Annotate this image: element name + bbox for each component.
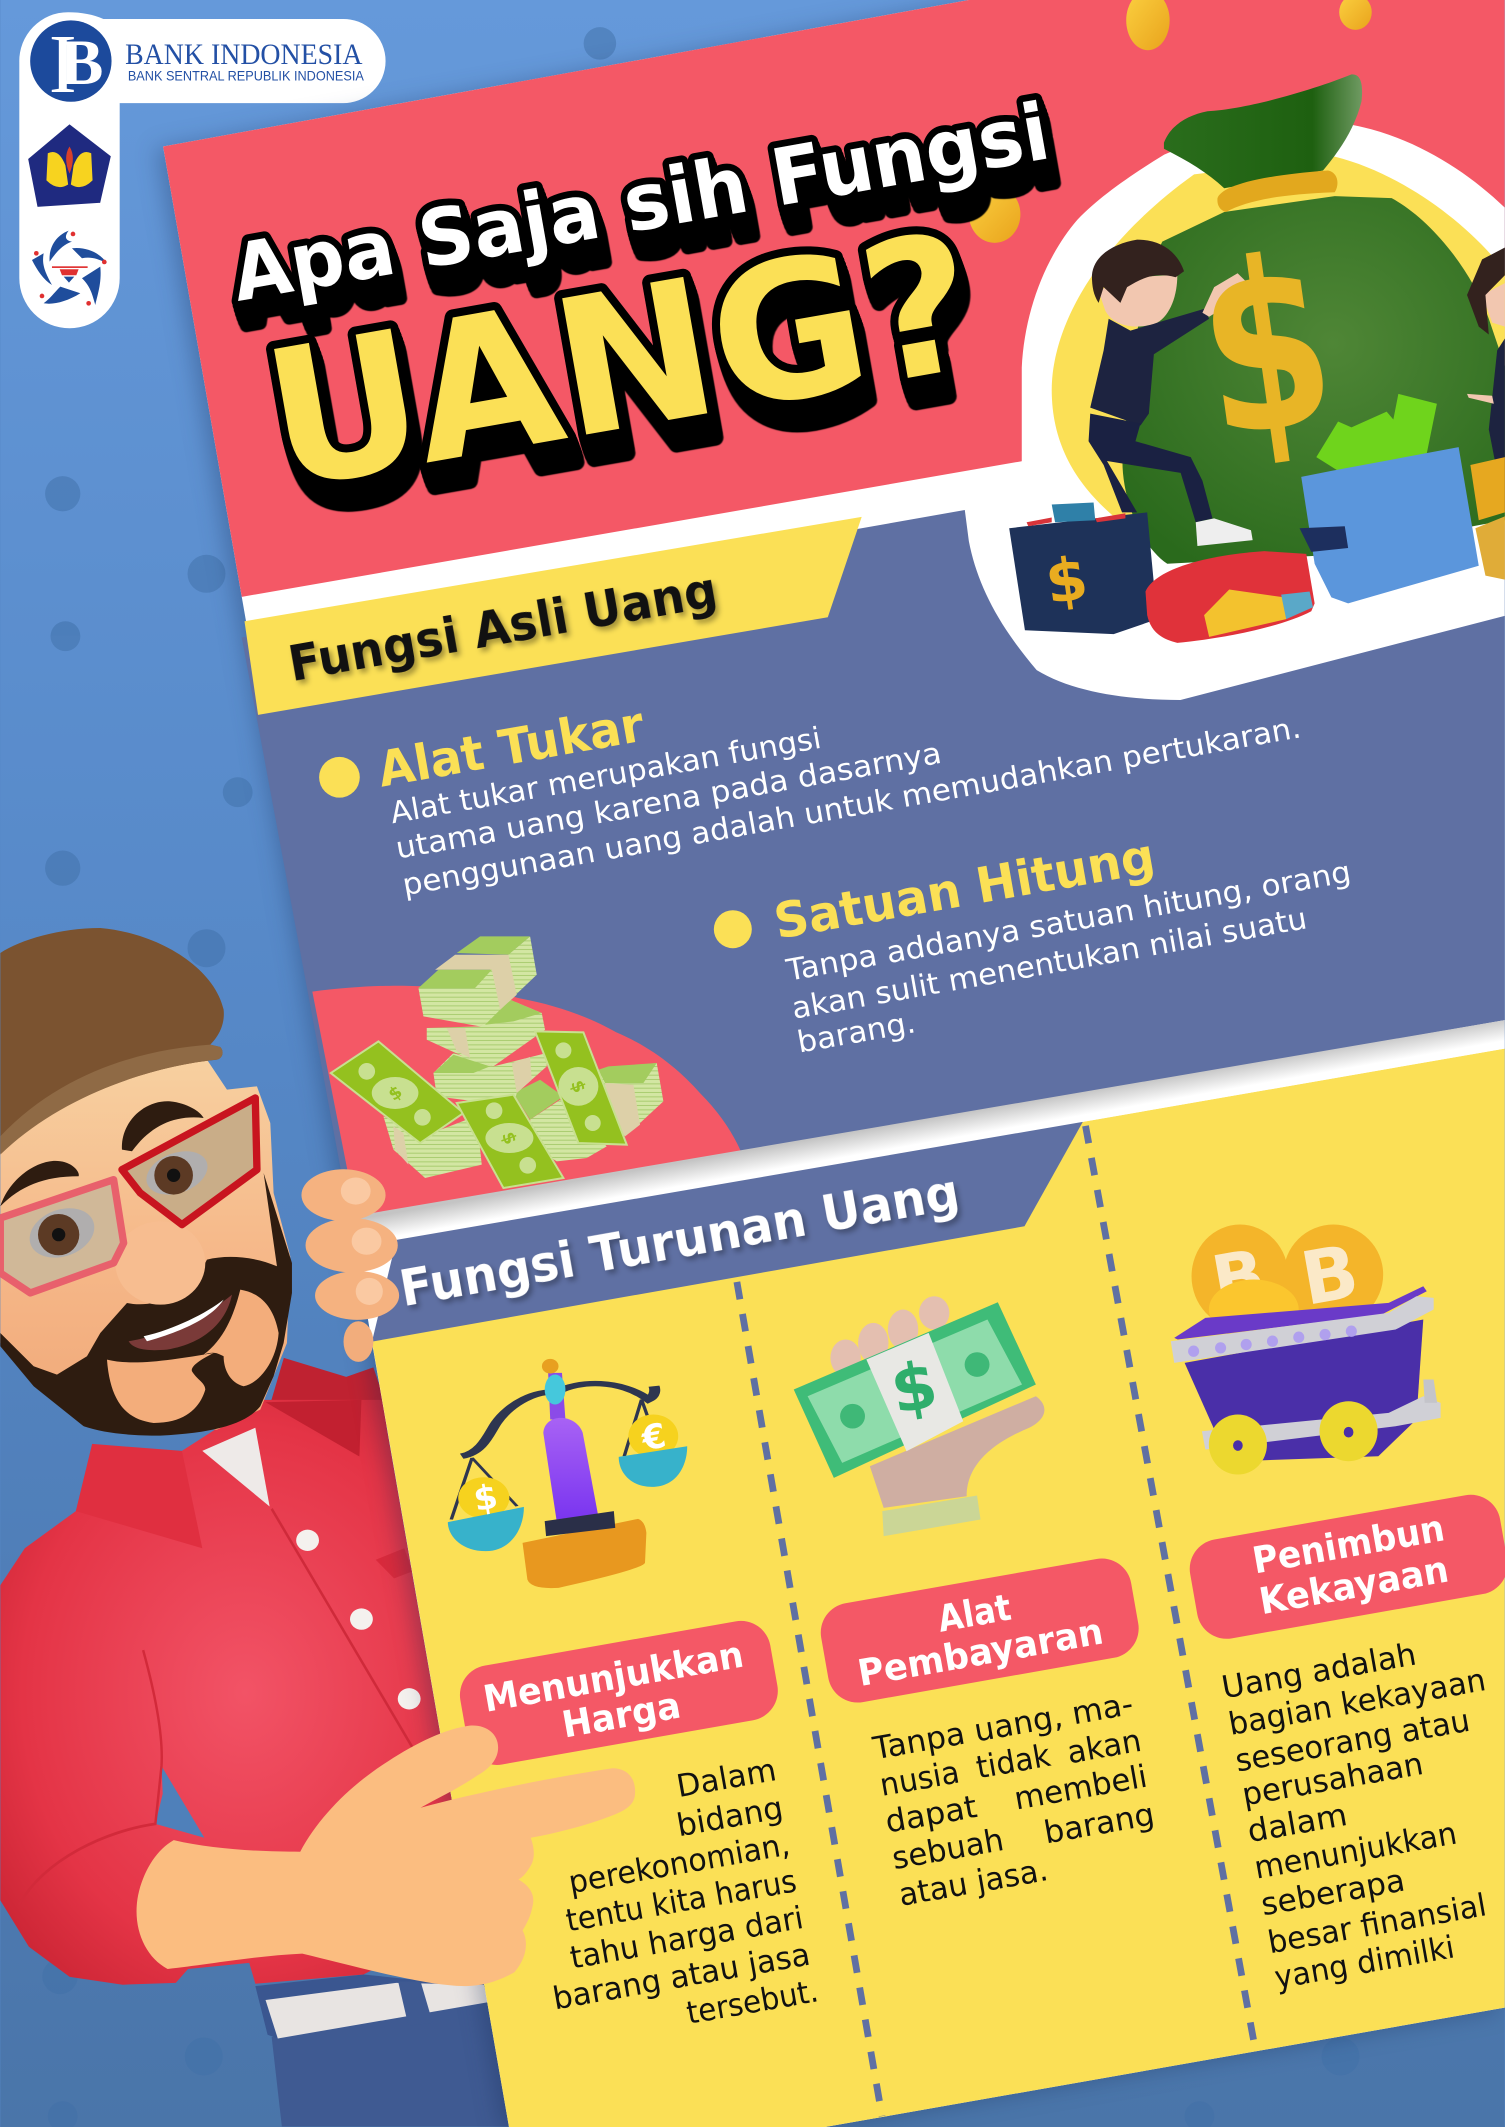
section tag: fungsi asli uang — [244, 517, 862, 715]
pill: alat pembayaran — [816, 1554, 1143, 1707]
text: penimbun kekayaan — [1219, 1637, 1489, 1997]
white belt — [266, 1983, 488, 2038]
coin top right — [1339, 0, 1372, 30]
description: penggunaan uang adalah untuk memudahkan pertukaran. — [400, 710, 1304, 903]
buttons — [296, 1530, 421, 1709]
description: barang. — [795, 1005, 918, 1061]
description: Tanpa addanya satuan hitung, orang — [783, 855, 1354, 989]
presenter head — [0, 928, 292, 1436]
right chin skin — [204, 1290, 279, 1386]
description — [783, 855, 1354, 1061]
text: alat pembayaran: dapat — [883, 1789, 980, 1841]
white blob — [965, 124, 1505, 700]
pill: penimbun kekayaan: Penimbun — [1249, 1506, 1448, 1582]
title line 1: Apa Saja sih Fungsi — [225, 86, 1056, 320]
icon: scale: $ — [471, 1477, 501, 1519]
cup — [1475, 516, 1505, 580]
hat — [0, 928, 224, 1153]
text: penimbun kekayaan: Uang adalah — [1219, 1637, 1419, 1706]
waistband — [255, 1975, 488, 2038]
person left — [1089, 240, 1253, 546]
icon: money pile — [331, 936, 663, 1188]
column dividers — [737, 1126, 1255, 2116]
title line 2: UANG? — [251, 191, 992, 533]
yellow tag — [244, 517, 862, 715]
placket — [272, 1509, 412, 1747]
pill: menunjukkan harga — [455, 1616, 783, 1770]
hat brim — [0, 1045, 223, 1155]
icon: money pile: $ — [566, 1078, 589, 1096]
red quadrant — [312, 986, 741, 1219]
description: Alat tukar merupakan fungsi — [388, 721, 824, 831]
logo: swirl emblem — [32, 231, 107, 306]
text: penimbun kekayaan: seberapa — [1258, 1863, 1408, 1923]
white undershirt — [202, 1428, 270, 1506]
gap under arm — [155, 1766, 204, 1838]
text: menunjukkan harga — [550, 1752, 821, 2032]
text: penimbun kekayaan: seseorang atau — [1233, 1703, 1473, 1779]
title — [225, 86, 1056, 533]
face — [0, 1060, 290, 1430]
text: penimbun kekayaan: dalam — [1245, 1797, 1350, 1850]
description: akan sulit menentukan nilai suatu — [789, 901, 1310, 1027]
icon: hand with money — [794, 1296, 1044, 1536]
shirt — [0, 1400, 490, 1985]
beard — [0, 1173, 292, 1436]
icon: hand with money: $ — [885, 1348, 943, 1429]
eyebrows — [0, 1101, 204, 1206]
text: penimbun kekayaan: bagian kekayaan — [1226, 1662, 1489, 1743]
icon: bitcoin cart: B — [1206, 1234, 1271, 1321]
logo: university shield — [27, 123, 112, 208]
panel: fungsi turunan — [372, 1049, 1505, 2127]
coin behind title — [969, 186, 1020, 243]
logo: Bank Indonesia emblem: B — [60, 27, 103, 99]
briefcase dollar sign: $ — [1041, 544, 1092, 618]
bullet — [714, 910, 752, 948]
presenter body — [0, 1400, 510, 2126]
satuan hitung block — [714, 827, 1354, 1061]
logo: Bank Indonesia emblem: I — [49, 18, 77, 111]
pill: penimbun kekayaan — [1185, 1490, 1505, 1644]
pill: menunjukkan harga: Harga — [559, 1683, 684, 1747]
heading: Satuan Hitung — [770, 827, 1159, 951]
mouth — [129, 1295, 232, 1350]
person right — [1467, 248, 1505, 512]
header band — [163, 0, 1505, 597]
wallet strap — [1300, 526, 1348, 552]
presenter fingers gripping panel — [301, 1169, 399, 1362]
heading: Alat Tukar — [374, 696, 648, 799]
lower chin skin — [107, 1353, 214, 1423]
sleeve fold — [19, 1650, 162, 1905]
collar left — [76, 1444, 202, 1548]
illustration: money bag scene — [965, 74, 1505, 700]
text: alat pembayaran: akan — [1064, 1723, 1144, 1771]
wallet — [1301, 447, 1479, 603]
text: penimbun kekayaan: yang dimilki — [1272, 1929, 1457, 1997]
text: penimbun kekayaan: besar finansial — [1265, 1887, 1489, 1961]
bag neck — [1164, 74, 1362, 188]
alat tukar block — [319, 696, 1304, 903]
nose — [115, 1221, 205, 1305]
text: menunjukkan harga: barang atau jasa — [550, 1937, 813, 2017]
bag body — [1122, 196, 1505, 564]
presenter shoulder behind beard — [263, 1358, 394, 1427]
text: alat pembayaran: membeli — [1011, 1759, 1150, 1817]
icon: money pile: $ — [497, 1129, 520, 1147]
pill: menunjukkan harga: Menunjukkan — [480, 1633, 747, 1721]
text: penimbun kekayaan: perusahaan — [1239, 1746, 1426, 1813]
text: alat pembayaran: atau jasa. — [896, 1852, 1051, 1914]
green bills — [1316, 394, 1437, 473]
text: alat pembayaran: barang — [1041, 1797, 1157, 1851]
icon: scale: € — [638, 1416, 669, 1458]
white logo pill — [19, 12, 386, 328]
tag heading: Fungsi Turunan Uang — [395, 1162, 964, 1318]
text: alat pembayaran — [869, 1686, 1157, 1914]
teeth — [144, 1300, 224, 1341]
text: menunjukkan harga: tersebut. — [684, 1973, 821, 2032]
text: menunjukkan harga: Dalam — [674, 1752, 779, 1805]
text: alat pembayaran: tidak — [973, 1738, 1053, 1786]
pill: alat pembayaran: Alat — [934, 1586, 1014, 1641]
belt loop — [398, 1981, 433, 2025]
section tag: fungsi turunan uang — [350, 1020, 1505, 1342]
icon: money pile: $ — [385, 1082, 406, 1105]
briefcase — [1009, 503, 1157, 634]
logo text: Bank Indonesia: BANK SENTRAL REPUBLIK INDONESIA — [128, 69, 364, 85]
coin top left — [1126, 0, 1170, 50]
collar right — [266, 1400, 361, 1456]
icon: scale — [448, 1359, 687, 1588]
white strip with soft shadow — [350, 1020, 1505, 1240]
text: alat pembayaran: Tanpa uang, ma- — [869, 1686, 1136, 1767]
logo panel — [19, 12, 386, 328]
text: menunjukkan harga: bidang — [674, 1790, 786, 1844]
tag heading: Fungsi Asli Uang — [284, 561, 722, 693]
pie chart — [1146, 551, 1315, 643]
text: menunjukkan harga: tahu harga dari — [567, 1900, 806, 1976]
description: utama uang karena pada dasarnya — [393, 736, 944, 867]
presenter pointing hand — [137, 1726, 635, 1986]
pocket — [376, 1548, 412, 1578]
text: alat pembayaran: sebuah — [889, 1822, 1007, 1877]
text: menunjukkan harga: perekonomian, — [566, 1827, 793, 1901]
coin stack — [1470, 457, 1505, 520]
pill: alat pembayaran: Pembayaran — [854, 1610, 1106, 1695]
pill: penimbun kekayaan: Kekayaan — [1256, 1548, 1452, 1623]
icon: bitcoin cart: B — [1295, 1229, 1365, 1323]
logo text: Bank Indonesia — [125, 38, 364, 85]
logo text: Bank Indonesia: BANK INDONESIA — [125, 38, 363, 71]
bullet — [319, 757, 360, 798]
text: menunjukkan harga: tentu kita harus — [563, 1863, 799, 1939]
logo: Bank Indonesia emblem — [30, 18, 112, 111]
glasses — [0, 1098, 257, 1293]
text: penimbun kekayaan: menunjukkan — [1252, 1816, 1460, 1887]
panel: fungsi asli — [242, 415, 1505, 1221]
icon: bitcoin cart — [1171, 1225, 1441, 1475]
big dollar sign: $ — [1184, 205, 1348, 492]
blue tag — [372, 1122, 1083, 1342]
yellow backdrop — [1052, 157, 1505, 524]
text: alat pembayaran: nusia — [877, 1755, 962, 1804]
bag ring — [1217, 170, 1337, 212]
trousers — [272, 1998, 510, 2126]
